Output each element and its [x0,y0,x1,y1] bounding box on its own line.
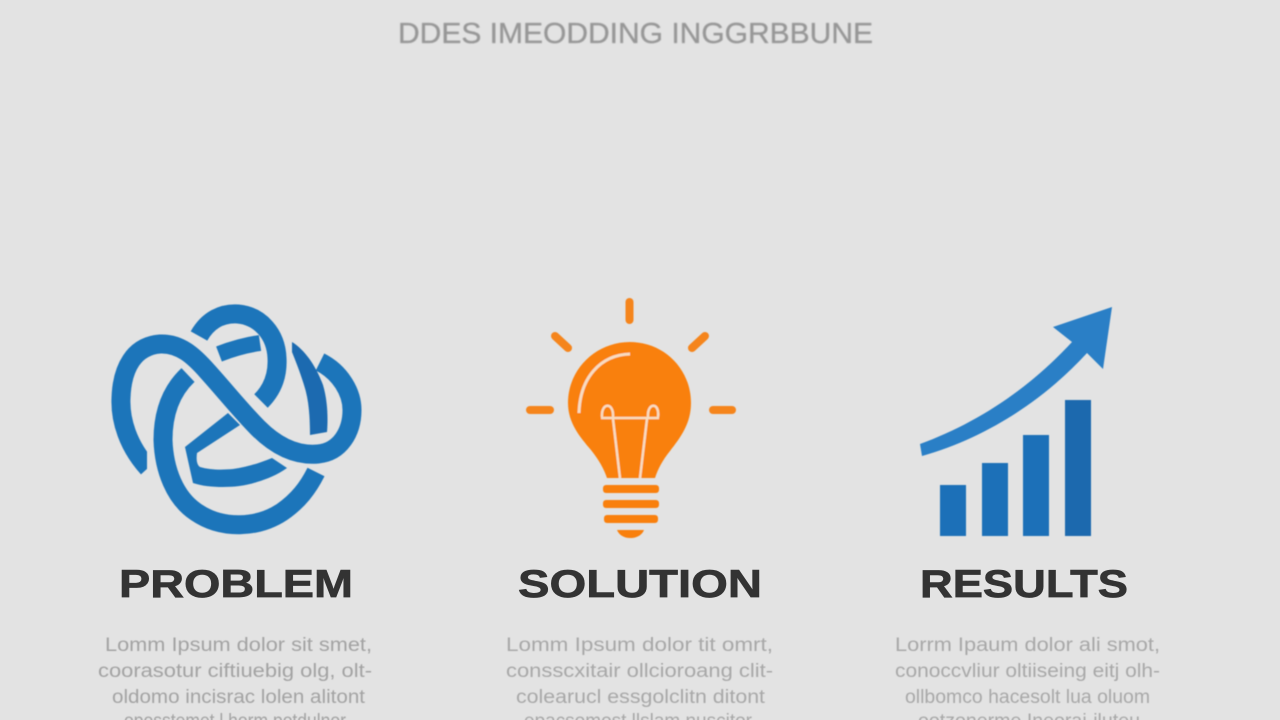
heading: results: RESULTS [920,563,1128,606]
heading: solution: SOLUTION [518,563,762,606]
chart bars [940,400,1091,536]
panel: solution [506,302,773,720]
icon: bulb glass [568,342,691,478]
title: DDES IMEODDING INGGRBBUNE [398,18,873,50]
icon: knot [121,314,352,525]
text block: solution: consscxitair ollcioroang clit- [506,661,773,682]
icon: light bulb [530,302,732,538]
text block: problem [98,635,372,720]
panel: results [895,307,1160,720]
text block: problem: coorasotur ciftiuebig olg, olt- [98,661,372,682]
text block: solution: colearucl essgolclitn ditont [516,687,766,708]
arrow [920,307,1112,456]
icon: bulb base [603,485,659,538]
text block: solution: Lomm Ipsum dolor tit omrt, [506,635,773,656]
icon: bulb rays [530,302,732,410]
text block: problem: oldomo incisrac lolen alitont [112,687,366,708]
icon: bulb highlight and filament [579,354,659,478]
icon: growth chart [920,307,1112,536]
text block: results: Lorrm Ipaum dolor ali smot, [895,635,1160,656]
text block: results: ollbomco hacesolt lua oluom [905,687,1150,708]
text block: results [895,635,1160,720]
text block: problem: Lomm Ipsum dolor sit smet, [105,635,372,656]
panel: problem [98,314,372,720]
heading: problem: PROBLEM [119,563,353,606]
text block: solution [506,635,773,720]
text block: results: conoccvliur oltiiseing eitj olh- [895,661,1160,682]
